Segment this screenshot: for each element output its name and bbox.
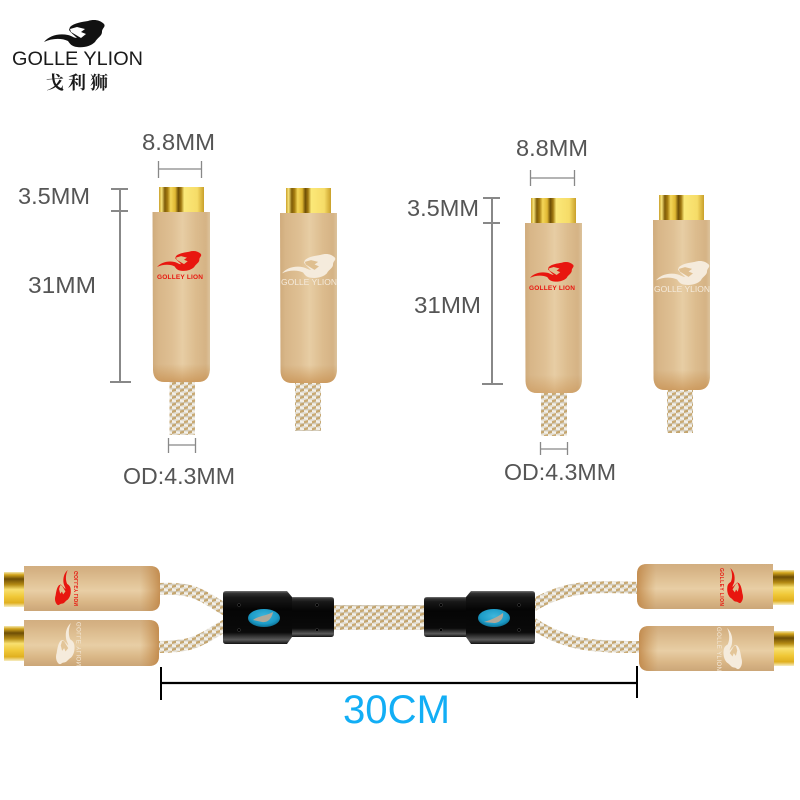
connector: top right (637, 564, 794, 609)
splitter: left (223, 591, 334, 644)
label: red brand text: GOLLEY LION (718, 568, 724, 606)
icon: blue badge (478, 609, 510, 627)
label: 8.8MM: 8.8MM (516, 135, 588, 161)
label: white brand text: GOLLE YLION (77, 622, 83, 666)
connector: top left (4, 566, 160, 611)
label: 31MM: 31MM (414, 292, 481, 318)
icon: white lion (56, 623, 75, 664)
icon: red lion (157, 251, 201, 271)
connector: bottom left (4, 620, 159, 666)
label: 30CM: 30CM (343, 688, 450, 732)
icon: white lion (723, 628, 742, 669)
label: red brand text: GOLLEY LION (157, 274, 203, 281)
panel: right connector pair dimensions (407, 135, 710, 485)
dimension: cable outer diameter (540, 442, 568, 455)
label: 8.8MM: 8.8MM (142, 129, 215, 155)
dimension: height lines (110, 189, 131, 382)
label: 3.5MM: 3.5MM (407, 195, 479, 221)
label: OD 4.3MM: OD:4.3MM (123, 463, 235, 489)
connector: red logo (525, 198, 582, 436)
label: OD 4.3MM: OD:4.3MM (504, 459, 616, 485)
icon: red lion (530, 262, 574, 282)
label: white brand text: GOLLE YLION (281, 277, 337, 287)
connector: white logo (280, 188, 337, 431)
brand name in Chinese: 戈利狮 (46, 69, 112, 95)
panel: full Y cable assembly (4, 564, 794, 732)
connector: bottom right (639, 626, 794, 671)
label: white brand text: GOLLE YLION (654, 284, 710, 294)
label: 31MM: 31MM (28, 272, 96, 298)
dimension: 8.8MM width (158, 161, 202, 178)
icon: red lion (55, 570, 71, 605)
dimension: 8.8MM width (530, 170, 574, 186)
dimension: cable outer diameter (168, 438, 196, 453)
dimension: 30CM length bracket (161, 666, 637, 700)
icon: white lion (282, 254, 335, 278)
icon: blue badge (248, 609, 280, 627)
label: red brand text: GOLLEY LION (529, 285, 575, 292)
label: 3.5MM: 3.5MM (18, 183, 90, 209)
icon: white lion (656, 261, 709, 285)
splitter: right (424, 591, 535, 644)
brand name: GOLLE YLION (12, 49, 143, 70)
logo: Golle Ylion (12, 20, 143, 95)
connector: white logo (653, 195, 710, 433)
label: red brand text: GOLLEY LION (74, 571, 80, 606)
connector: red logo (152, 187, 210, 435)
label: white brand text: GOLLE YLION (715, 627, 721, 671)
dimension: height lines (482, 198, 503, 384)
panel: left connector pair dimensions (18, 129, 337, 489)
icon: red lion (727, 568, 743, 603)
icon: black lion (44, 20, 105, 47)
cables: braided (158, 587, 642, 647)
